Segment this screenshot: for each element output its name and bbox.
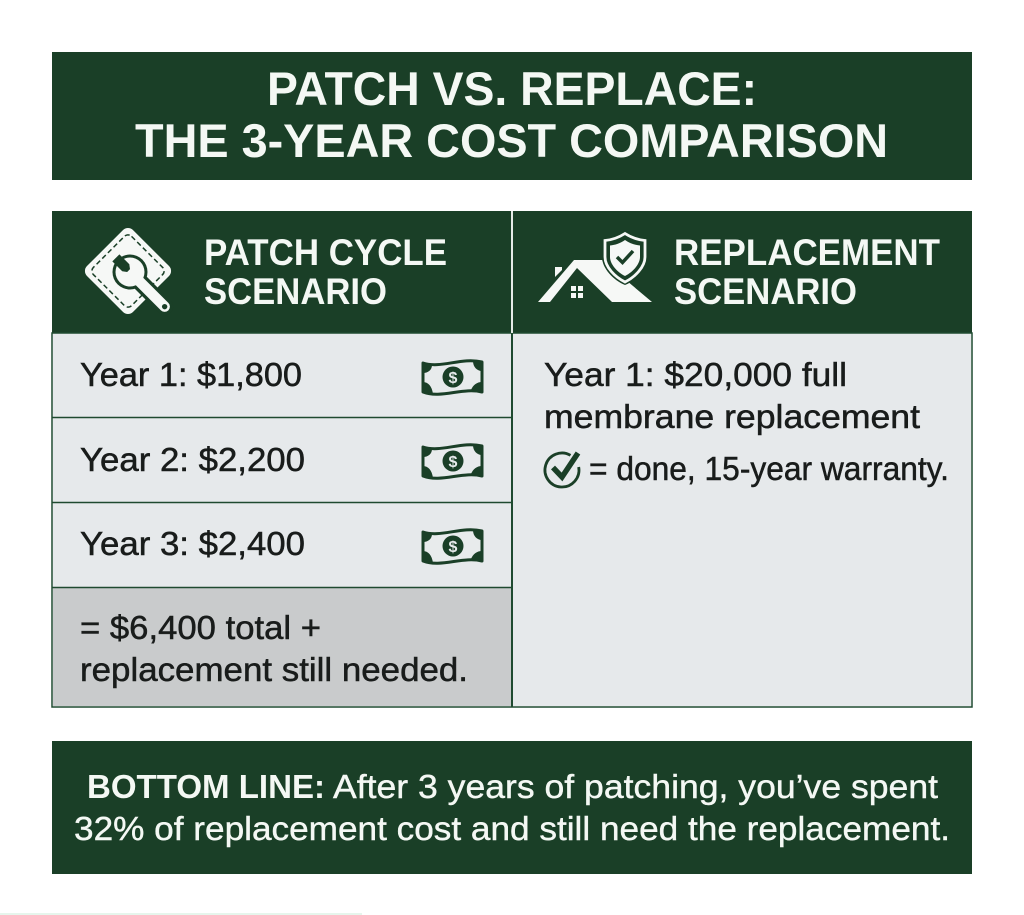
replacement cost text [544,356,920,435]
icon: money bill: $ [449,454,458,471]
icon: money bill [423,530,482,563]
icon: money bill: $ [449,370,458,387]
bottom line text: After 3 years of patching, you’ve spent [333,768,938,805]
patch cycle header [52,211,511,333]
patch cycle heading [204,232,447,312]
icon: check circle [545,453,579,487]
title banner [52,52,972,180]
bottom edge tint [0,913,362,915]
year 2 row: Year 2: $2,200 [80,441,305,478]
title text [135,62,888,167]
replacement heading: REPLACEMENT [674,232,940,273]
year 2 row [53,418,511,502]
year 1 row [53,333,511,417]
panel: patch cycle scenario [52,211,511,706]
replacement heading [674,232,940,312]
patch cycle total [53,588,511,706]
icon: money bill [423,445,482,478]
bottom line text: 32% of replacement cost and still need the replacement. [74,810,950,847]
year 3 row [53,503,511,587]
patch cycle heading: PATCH CYCLE [204,232,447,273]
bottom line text: BOTTOM LINE: [87,768,325,805]
replacement cost text: Year 1: $20,000 full [544,356,847,393]
icon: money bill [423,361,482,394]
title text: PATCH VS. REPLACE: [267,62,757,115]
replacement header [513,211,972,333]
icon: patch with wrench [82,225,179,321]
panel: replacement scenario [513,211,972,706]
year 1 row: Year 1: $1,800 [80,356,302,393]
icon: money bill: $ [449,539,458,556]
replacement body [513,333,971,706]
warranty text: = done, 15-year warranty. [589,450,949,487]
bottom line text [74,768,950,847]
patch cycle total: = $6,400 total + [80,609,321,646]
table borders [52,211,972,707]
patch cycle heading: SCENARIO [204,271,387,312]
replacement heading: SCENARIO [674,271,857,312]
patch cycle total: replacement still needed. [80,651,468,688]
replacement cost text: membrane replacement [544,398,920,435]
year 3 row: Year 3: $2,400 [80,525,305,562]
bottom line banner [52,741,972,874]
icon: roof with shield [538,230,652,302]
title text: THE 3-YEAR COST COMPARISON [135,114,888,167]
